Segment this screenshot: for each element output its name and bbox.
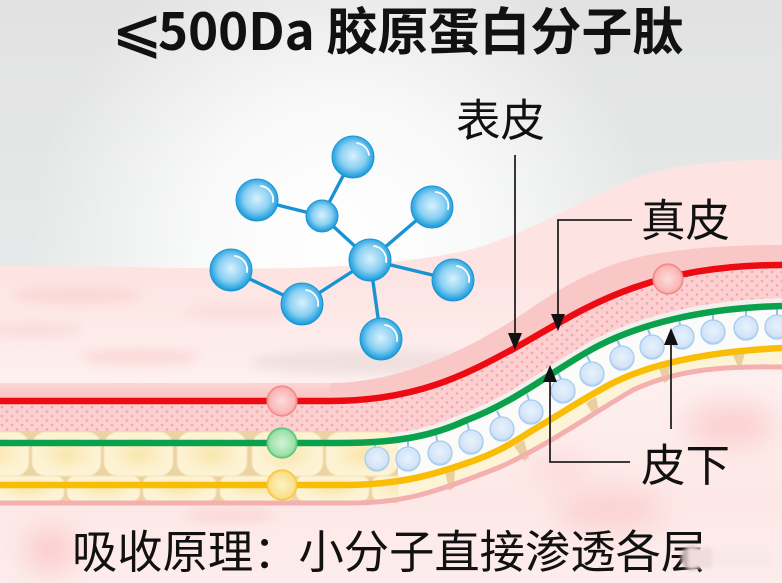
- white subcutaneous band: [398, 306, 782, 482]
- skin bottom edge: [0, 367, 782, 503]
- bubbles in subcutaneous layer: [365, 307, 782, 471]
- markers on layer lines: [267, 264, 683, 500]
- arrow: subcutis right: [664, 328, 678, 429]
- arrow: epidermis: [508, 155, 522, 350]
- pale strip above the green line: [392, 302, 782, 437]
- fat cells: [0, 431, 432, 503]
- green line: dermis: [0, 306, 782, 443]
- arrow: dermis: [551, 220, 632, 331]
- deep skin tissue background: [0, 160, 782, 583]
- layer lines: [0, 265, 782, 485]
- caption: 吸收原理：小分子直接渗透各层: [72, 527, 706, 578]
- layer: fat band on the right: [345, 348, 782, 503]
- skin layers: [0, 245, 782, 503]
- red line: epidermis: [0, 265, 782, 401]
- fat band separators: [445, 353, 745, 491]
- yellow line: subcutis: [0, 348, 782, 485]
- blurred watermark: [681, 546, 770, 570]
- arrow: subcutis left: [543, 365, 630, 462]
- label: dermis: 真皮: [641, 197, 730, 246]
- molecule: [210, 136, 474, 360]
- layer: epidermis band: [0, 245, 782, 405]
- label: subcutis: 皮下: [641, 442, 730, 491]
- bubble stems: [375, 307, 777, 447]
- layer: dermis dotted band: [0, 265, 782, 443]
- label: epidermis: 表皮: [456, 97, 545, 146]
